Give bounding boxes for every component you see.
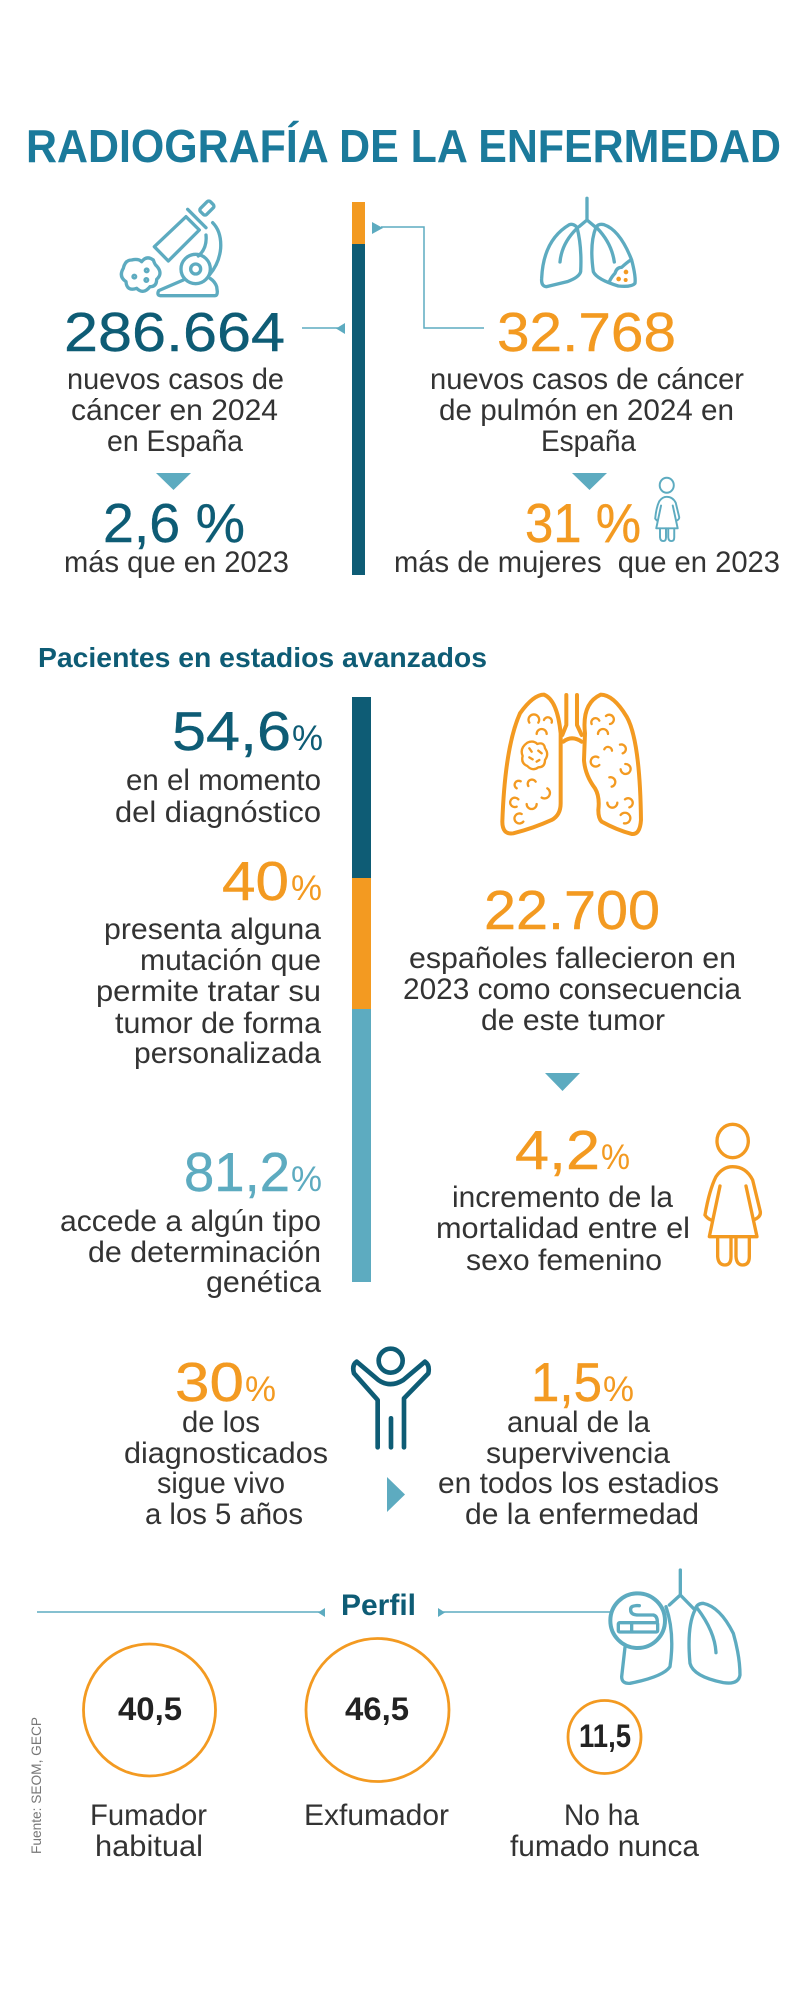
stat: total increase: 2,6 % [103,492,245,554]
arrow: total cases to bar [302,323,345,334]
stat: annual survival: % [603,1370,634,1409]
stat: genetic testing [60,1141,322,1299]
arrow: down left [156,473,191,490]
stat: deaths: de este tumor [481,1004,665,1037]
icon: lungs with cigarette [610,1570,740,1683]
stat: five year survival: 30 [175,1351,244,1413]
stat: total cases [64,301,285,458]
stat: total cases: nuevos casos de [67,363,284,396]
source note: Fuente: SEOM, GECP [28,1717,44,1854]
panel: survival [124,1349,719,1531]
stat: female mortality [436,1119,690,1277]
stat: mutation: tumor de forma [115,1007,321,1040]
stat: genetic testing: 81,2 [184,1141,290,1203]
stat: women increase: 31 % [525,492,641,554]
stat: at diagnosis [115,700,323,829]
heading: profile: Perfil [341,1589,416,1622]
stat: mutation: permite tratar su [96,975,321,1008]
stat: annual survival: de la enfermedad [465,1498,699,1531]
arrow: down right [572,473,607,490]
stat: mutation: 40 [222,850,289,912]
stat: genetic testing: accede a algún tipo [60,1205,321,1238]
stat: lung cases: España [541,425,636,458]
arrow: down deaths [545,1073,580,1091]
stat: five year survival: % [245,1370,276,1409]
arrow: lung cases to bar [372,222,484,328]
stat: lung cases [430,301,744,458]
stat: five year survival [124,1351,328,1531]
stacked bar: advanced stage percentages [352,697,371,1282]
panel: new cases overview [64,198,780,579]
label: former smoker: Exfumador [304,1799,449,1832]
stat: deaths: 22.700 [484,879,660,941]
stat: annual survival: anual de la [507,1406,650,1439]
heading: advanced stage patients: Pacientes en estadios avanzados [38,642,487,673]
stacked bar: lung share of all cancer cases [352,202,365,575]
stat: genetic testing: genética [206,1266,321,1299]
stat: lung cases: 32.768 [497,301,676,363]
stat: lung cases: de pulmón en 2024 en [439,394,734,427]
label: habitual smoker: habitual [95,1830,203,1863]
stat: genetic testing: de determinación [88,1236,321,1269]
label: habitual smoker [90,1799,207,1863]
label: never smoked: fumado nunca [510,1830,699,1863]
stat: deaths: 2023 como consecuencia [403,973,741,1006]
stat: five year survival: a los 5 años [145,1498,303,1531]
label: never smoked [510,1799,699,1863]
icon: woman small [655,478,679,541]
stat: total cases: en España [107,425,243,458]
stat: genetic testing: % [291,1160,322,1199]
stat: annual survival: supervivencia [486,1437,670,1470]
stat: mutation: % [291,869,322,908]
stat: total cases: cáncer en 2024 [71,394,278,427]
stat: women increase [394,492,780,579]
circle: never smoked [568,1700,641,1774]
stat: at diagnosis: en el momento [126,764,321,797]
label: never smoked: No ha [564,1799,639,1832]
stat: women increase: más de mujeres que en 2023 [394,546,780,579]
icon: lungs with tumour [542,198,635,287]
icon: person with raised arms [353,1349,429,1447]
stat: lung cases: nuevos casos de cáncer [430,363,744,396]
stat: total cases: 286.664 [64,301,285,363]
icon: woman large [705,1124,760,1265]
icon: microscope [121,200,221,296]
stat: annual survival: 1,5 [531,1351,602,1413]
stat: mutation: personalizada [134,1037,321,1070]
stat: five year survival: sigue vivo [157,1467,285,1500]
arrow: right rule [438,1608,615,1617]
circle: never smoked: 11,5 [579,1718,631,1754]
stat: mutation [96,850,322,1070]
stat: mutation: mutación que [140,944,321,977]
panel: advanced stage patients [60,695,760,1299]
stat: female mortality: 4,2 [515,1119,600,1181]
stat: annual survival [438,1351,719,1531]
circle: former smoker: 46,5 [345,1691,409,1727]
stat: total increase: más que en 2023 [64,546,289,579]
circle: habitual smoker [84,1644,216,1776]
stat: five year survival: de los [182,1406,260,1439]
stat: female mortality: incremento de la [452,1181,673,1214]
stat: five year survival: diagnosticados [124,1437,328,1470]
stat: female mortality: % [601,1138,630,1177]
panel: smoker profile [37,1570,740,1863]
stat: female mortality: sexo femenino [466,1244,662,1277]
stat: at diagnosis: 54,6 [172,700,291,762]
stat: at diagnosis: del diagnóstico [115,796,321,829]
stat: annual survival: en todos los estadios [438,1467,719,1500]
stat: deaths [403,879,741,1037]
stat: total increase [64,492,289,579]
label: habitual smoker: Fumador [90,1799,207,1832]
stat: deaths: españoles fallecieron en [409,942,736,975]
arrow: right [387,1477,405,1512]
circle: habitual smoker: 40,5 [118,1691,182,1727]
stat: female mortality: mortalidad entre el [436,1212,690,1245]
stat: mutation: presenta alguna [104,913,321,946]
circle: former smoker [306,1638,449,1782]
icon: orange lungs [502,695,641,834]
stat: at diagnosis: % [292,719,323,758]
arrow: left rule [37,1608,325,1617]
